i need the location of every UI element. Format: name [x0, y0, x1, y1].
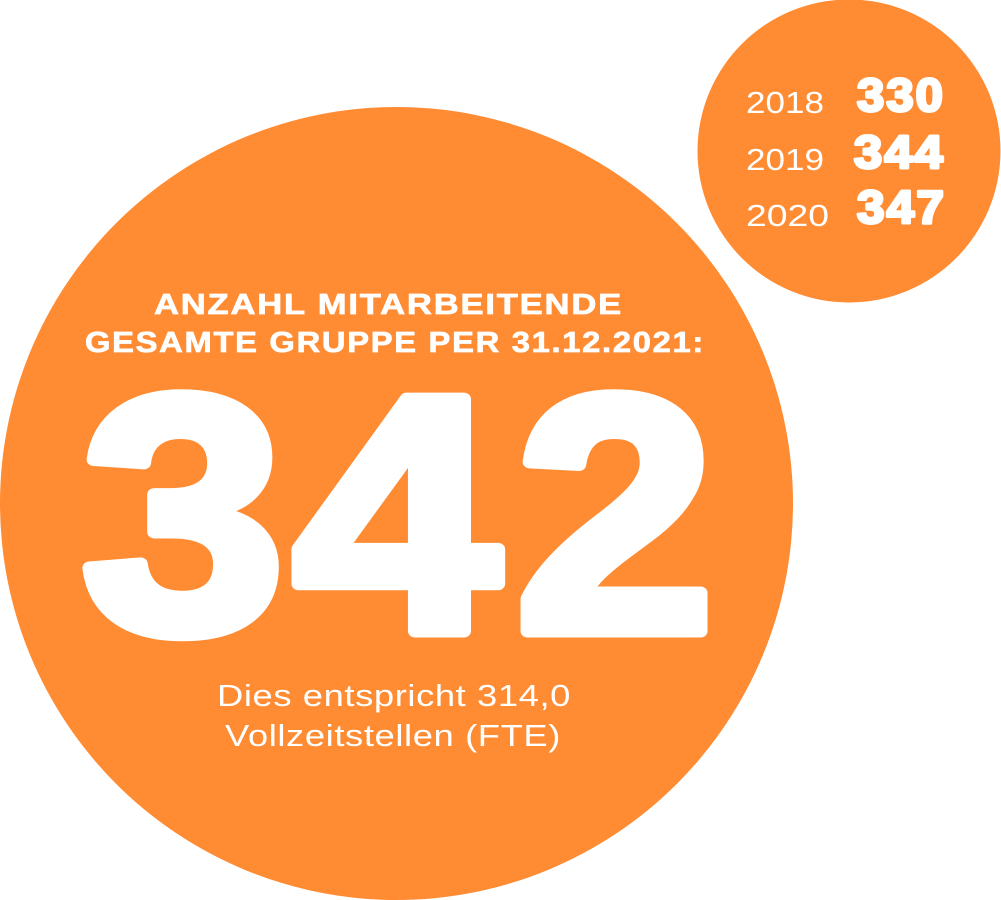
row: 2018: 2018: [746, 85, 824, 120]
panel: main circle: [0, 107, 793, 900]
row: 2020: 2020: [746, 198, 829, 233]
row: 2020: 347: [857, 181, 946, 233]
big number 342: 3: [81, 327, 285, 703]
text: FTE note: [217, 678, 571, 753]
row: 2018: 330: [857, 69, 945, 121]
heading: staff count: ANZAHL MITARBEITENDE: [154, 289, 623, 321]
heading: staff count: [85, 289, 705, 359]
text: FTE note: Vollzeitstellen (FTE): [225, 718, 561, 753]
panel: previous years circle: [698, 0, 1000, 302]
big number 342: 2: [515, 327, 715, 703]
text: FTE note: Dies entspricht 314,0: [217, 678, 571, 713]
row: 2018: [746, 69, 945, 121]
row: 2019: 344: [854, 126, 945, 178]
heading: staff count: GESAMTE GRUPPE PER 31.12.2021:: [85, 327, 705, 359]
big number 342: [81, 327, 715, 703]
row: 2019: 2019: [746, 142, 824, 177]
row: 2019: [746, 126, 945, 178]
row: 2020: [746, 181, 946, 233]
big number 342: 4: [293, 327, 502, 703]
